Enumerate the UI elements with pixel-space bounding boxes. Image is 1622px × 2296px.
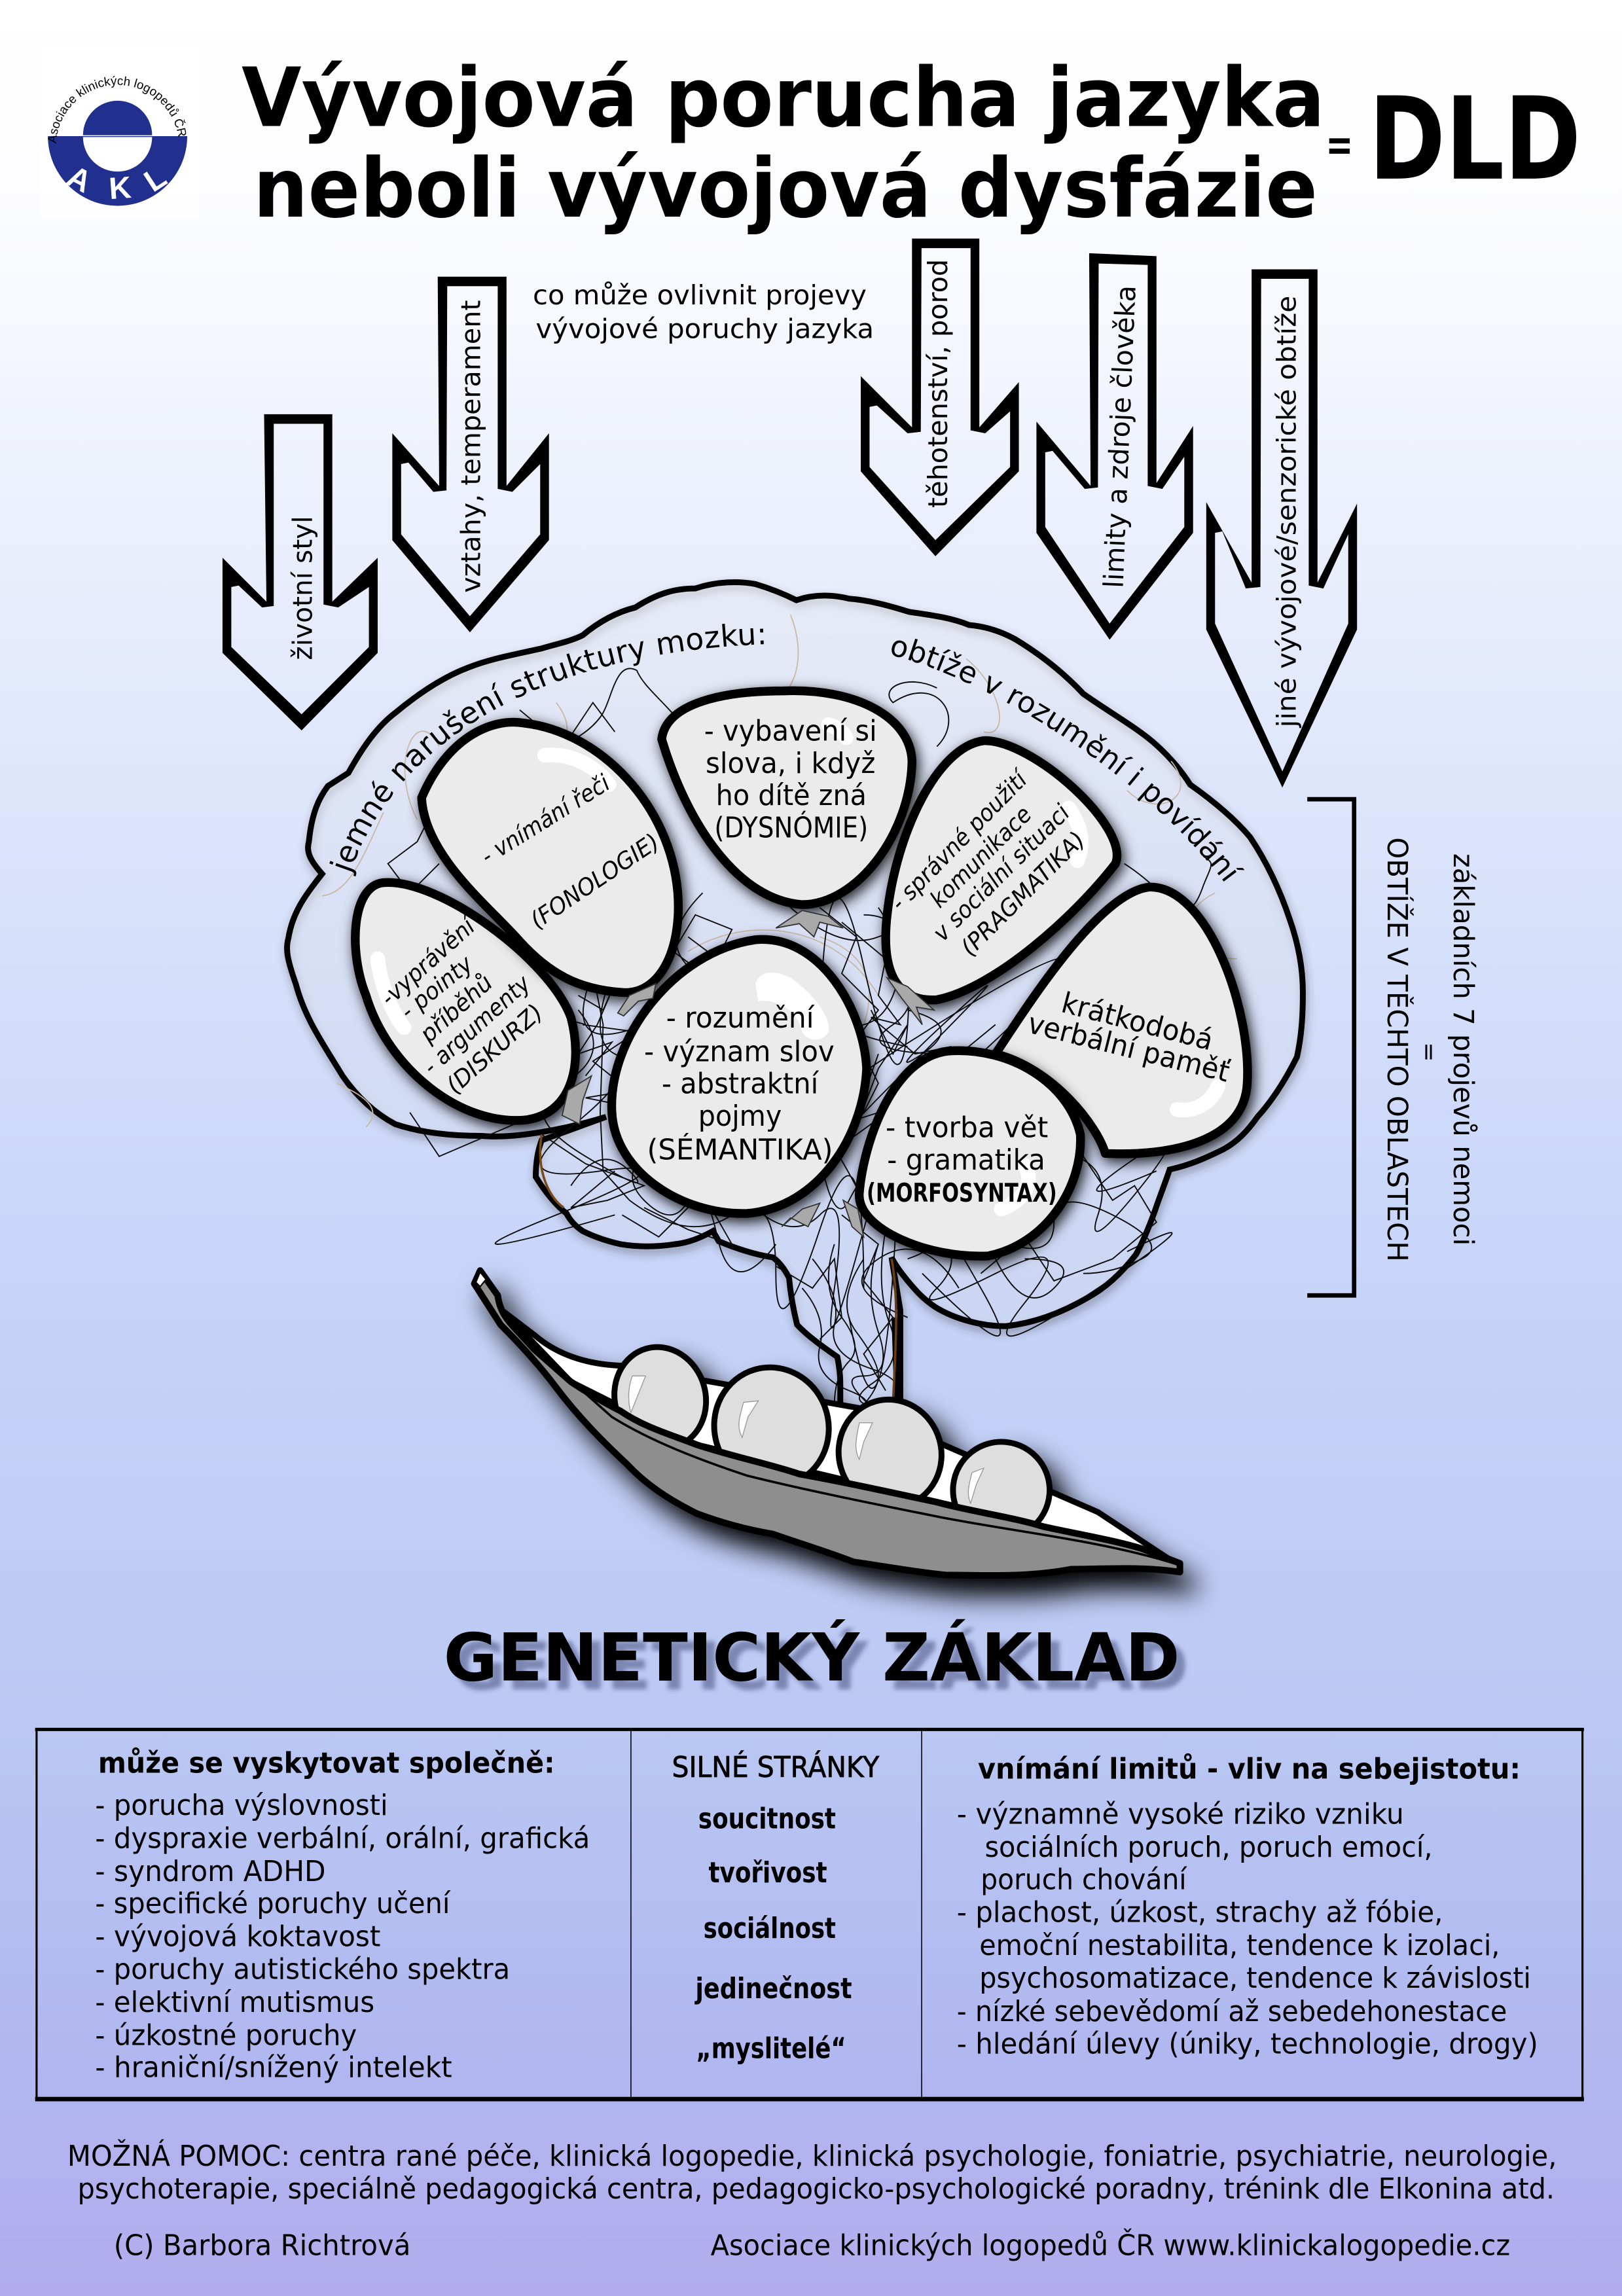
- column: strengths: [672, 1749, 880, 2065]
- brain outline: [287, 583, 1303, 1408]
- curved label: comprehension and speech difficulties: obtíže v rozumění i povídání: [892, 639, 1245, 882]
- egg: SÉMANTIKA: - význam slov: [644, 1035, 835, 1068]
- egg: DISKURZ: -vyprávění: [375, 911, 482, 1011]
- column: perception of limits: emoční nestabilita, tendence k izolaci,: [979, 1929, 1500, 1962]
- egg: MORFOSYNTAX: - gramatika: [887, 1144, 1045, 1177]
- footer: association: Asociace klinických logopedů ČR www.klinickalogopedie.cz: [711, 2227, 1510, 2262]
- column: co-occurring conditions: - hraniční/snížený intelekt: [95, 2052, 452, 2085]
- egg: DISKURZ: příběhů: [414, 969, 498, 1049]
- egg: MORFOSYNTAX: - tvorba vět: [886, 1112, 1048, 1145]
- column: perception of limits: poruch chování: [981, 1864, 1187, 1897]
- egg: krátkodobá verbální paměť: krátkodobá: [1058, 987, 1216, 1057]
- logo: AKL: L: [137, 159, 172, 198]
- egg: SÉMANTIKA: [612, 939, 867, 1213]
- caption: what can influence: co může ovlivnit projevy: [533, 279, 867, 311]
- column: co-occurring conditions: - dyspraxie verbální, orální, grafická: [95, 1823, 590, 1856]
- egg: PRAGMATIKA: [886, 741, 1117, 1000]
- column: perception of limits: - hledání úlevy (úniky, technologie, drogy): [957, 2028, 1538, 2060]
- column: co-occurring conditions: - porucha výslovnosti: [95, 1789, 388, 1822]
- egg: DYSNÓMIE: - vybavení si: [704, 715, 877, 748]
- egg: MORFOSYNTAX: (MORFOSYNTAX): [867, 1179, 1057, 1208]
- text block: possible help: psychoterapie, speciálně pedagogická centra, pedagogicko-psychologické poradny, trénink dle Elkonina atd.: [78, 2173, 1555, 2206]
- title: neboli vývojová dysfázie: [253, 141, 1318, 236]
- curved label: fine brain-structure disruptions: jemné narušení struktury mozku:: [329, 624, 764, 877]
- egg: DYSNÓMIE: [662, 691, 912, 905]
- side note: 7 manifestations: OBTÍŽE V TĚCHTO OBLASTECH: [1380, 837, 1414, 1262]
- egg: SÉMANTIKA: - rozumění: [666, 1002, 815, 1035]
- egg: DYSNÓMIE: ho dítě zná: [716, 780, 867, 812]
- egg: krátkodobá verbální paměť: verbální paměť: [1024, 1007, 1233, 1089]
- arrow: těhotenství, porod: [861, 239, 1019, 556]
- egg stems: [562, 910, 934, 1237]
- title: Vývojová porucha jazyka: [242, 50, 1325, 145]
- column: perception of limits: - významně vysoké riziko vzniku: [957, 1799, 1404, 1831]
- arrow: jiné vývojové/senzorické obtíže: jiné vývojové/senzorické obtíže: [1272, 296, 1302, 728]
- egg: DISKURZ: [355, 882, 575, 1121]
- arrow: limity a zdroje člověka: limity a zdroje člověka: [1098, 285, 1142, 588]
- column: co-occurring conditions: - poruchy autistického spektra: [95, 1954, 510, 1986]
- bracket: [1307, 799, 1354, 1295]
- column: co-occurring conditions: může se vyskytovat společně:: [98, 1746, 555, 1780]
- egg: PRAGMATIKA: - správné použití: [886, 764, 1035, 916]
- column: co-occurring conditions: - úzkostné poruchy: [95, 2019, 357, 2052]
- footer: copyright: (C) Barbora Richtrová: [114, 2229, 410, 2262]
- arrow: životní styl: životní styl: [287, 516, 318, 660]
- egg: MORFOSYNTAX: [859, 1050, 1081, 1256]
- panel: table: [35, 1729, 1584, 2099]
- egg: DISKURZ: (DISKURZ): [441, 999, 549, 1100]
- nerve wires: [388, 668, 1211, 1412]
- column: strengths: jedinečnost: [694, 1973, 852, 2005]
- egg: SÉMANTIKA: pojmy: [698, 1100, 782, 1133]
- egg: SÉMANTIKA: (SÉMANTIKA): [647, 1132, 833, 1166]
- heading: GENETICKÝ ZÁKLAD: GENETICKÝ ZÁKLAD: [444, 1619, 1180, 1696]
- column: co-occurring conditions: - specifické poruchy učení: [95, 1888, 451, 1920]
- arrow: vztahy, temperament: vztahy, temperament: [456, 300, 487, 593]
- egg: FONOLOGIE: - vnímání řeči: [477, 770, 615, 870]
- arrow: limity a zdroje člověka: [1036, 253, 1193, 639]
- side note: 7 manifestations: [1380, 837, 1479, 1262]
- egg: PRAGMATIKA: v sociální situaci: [928, 800, 1075, 947]
- arrow: jiné vývojové/senzorické obtíže: [1206, 270, 1357, 787]
- column: perception of limits: - nízké sebevědomí až sebedehonestace: [957, 1996, 1507, 2028]
- column: co-occurring conditions: - elektivní mutismus: [95, 1986, 374, 2019]
- title: [242, 50, 1325, 236]
- column: perception of limits: sociálních poruch, poruch emocí,: [984, 1831, 1433, 1864]
- egg: FONOLOGIE: (FONOLOGIE): [526, 829, 664, 935]
- heading: GENETICKÝ ZÁKLAD: GENETICKÝ ZÁKLAD: [452, 1628, 1189, 1705]
- egg: DYSNÓMIE: (DYSNÓMIE): [714, 810, 868, 844]
- egg: FONOLOGIE: [422, 722, 678, 993]
- column: strengths: sociálnost: [704, 1912, 836, 1945]
- egg: SÉMANTIKA: - abstraktní: [662, 1068, 820, 1101]
- caption: what can influence: [533, 279, 874, 345]
- logo: AKL: K: [108, 170, 132, 206]
- column: perception of limits: - plachost, úzkost, strachy až fóbie,: [957, 1896, 1443, 1929]
- column: co-occurring conditions: - vývojová koktavost: [95, 1920, 380, 1953]
- pea pod: [475, 1270, 1180, 1575]
- arrow: těhotenství, porod: těhotenství, porod: [922, 259, 954, 508]
- egg: DISKURZ: - pointy: [395, 950, 478, 1025]
- arrow: vztahy, temperament: [392, 277, 549, 632]
- text block: possible help: [67, 2138, 1557, 2206]
- arrow: životní styl: [223, 414, 378, 730]
- logo: AKL: A: [62, 158, 98, 199]
- egg: PRAGMATIKA: (PRAGMATIKA): [956, 827, 1090, 961]
- side note: 7 manifestations: základních 7 projevů nemoci: [1447, 853, 1479, 1246]
- logo: AKL: [48, 76, 187, 206]
- text block: possible help: MOŽNÁ POMOC: centra rané péče, klinická logopedie, klinická psychologie, foniatrie, psychiatrie, neurologie,: [67, 2138, 1557, 2173]
- column: strengths: soucitnost: [698, 1803, 836, 1835]
- column: perception of limits: psychosomatizace, tendence k závislosti: [979, 1962, 1531, 1995]
- egg: DISKURZ: - argumenty: [418, 970, 536, 1080]
- logo: AKL: Asociace klinických logopedů ČR: [48, 76, 186, 144]
- column: perception of limits: vnímání limitů - vliv na sebejistotu:: [978, 1752, 1521, 1785]
- column: strengths: „myslitelé“: [696, 2032, 846, 2065]
- column: co-occurring conditions: - syndrom ADHD: [95, 1856, 326, 1888]
- column: co-occurring conditions: [95, 1746, 590, 2085]
- column: strengths: tvořivost: [708, 1857, 827, 1890]
- egg: krátkodobá verbální paměť: [996, 887, 1248, 1154]
- egg: DYSNÓMIE: slova, i když: [706, 747, 875, 780]
- caption: what can influence: vývojové poruchy jazyka: [536, 314, 874, 345]
- column: strengths: SILNÉ STRÁNKY: [672, 1749, 880, 1784]
- column: perception of limits: [957, 1752, 1538, 2060]
- egg: PRAGMATIKA: komunikace: [925, 801, 1037, 913]
- side note: 7 manifestations: =: [1416, 1042, 1443, 1062]
